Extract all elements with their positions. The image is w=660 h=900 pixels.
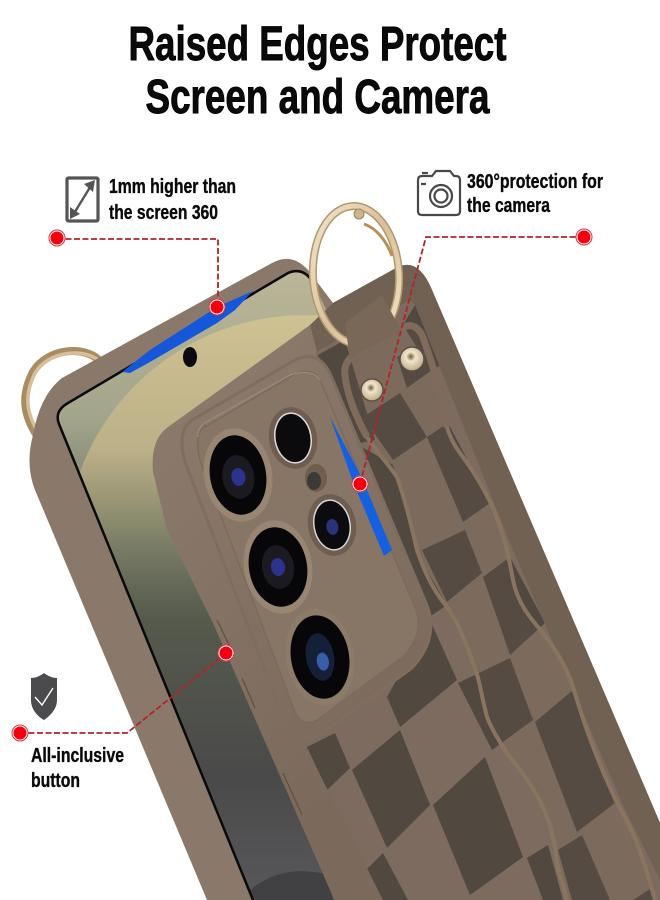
punch-hole camera <box>183 347 197 367</box>
callout text: All-inclusive <box>31 745 124 767</box>
lenses <box>196 403 362 711</box>
callout: 360 protection for the camera <box>352 171 603 492</box>
rivets <box>361 347 424 401</box>
marker dot on camera edge <box>352 476 368 492</box>
lens 2 <box>236 515 320 619</box>
camera island plate <box>198 372 418 723</box>
strap tab <box>345 295 410 360</box>
marker dot left <box>12 725 28 741</box>
dashed leader <box>20 653 226 733</box>
camera island <box>182 357 431 738</box>
top and right rim <box>310 265 660 880</box>
callout text: the screen 360 <box>109 202 218 224</box>
case back <box>153 265 660 900</box>
marker dot right <box>576 229 592 245</box>
lens 3 <box>278 603 362 711</box>
title: Raised Edges Protect <box>128 18 507 71</box>
callout text: 1mm higher than <box>109 176 236 198</box>
flash recess <box>305 464 327 492</box>
small lens <box>303 490 361 560</box>
marker dot on button <box>218 645 234 661</box>
callout: 1mm higher than the screen <box>49 176 236 315</box>
icon: shield with check <box>31 673 57 720</box>
marker dot left <box>49 230 65 246</box>
sensor with silver ring <box>264 403 322 473</box>
title: Screen and Camera <box>146 71 490 124</box>
side buttons <box>217 620 302 815</box>
icon: camera <box>418 171 460 215</box>
small gold ring on left <box>25 351 100 437</box>
large gold ring <box>309 204 403 346</box>
screen black bezel <box>58 271 314 900</box>
marker dot on edge <box>209 299 225 315</box>
checker panel <box>290 290 660 900</box>
blue highlight on top edge <box>122 291 253 373</box>
icon: diagonal arrow box <box>67 178 98 221</box>
phone case illustration <box>25 204 660 900</box>
callout text: the camera <box>467 195 551 217</box>
title <box>128 18 507 124</box>
strap head band <box>345 326 447 437</box>
case outer body <box>29 259 660 900</box>
checker squares <box>307 305 657 900</box>
phone screen <box>59 272 334 900</box>
dashed leader <box>57 239 218 307</box>
lens 1 <box>196 423 280 527</box>
callout text: 360°protection for <box>467 171 603 193</box>
wrist strap <box>345 326 660 900</box>
callout text: button <box>31 770 80 792</box>
callout: all-inclusive button <box>12 645 234 792</box>
blue highlight on camera edge <box>330 417 392 556</box>
island ridge line <box>198 372 320 437</box>
dashed leader <box>360 237 584 484</box>
